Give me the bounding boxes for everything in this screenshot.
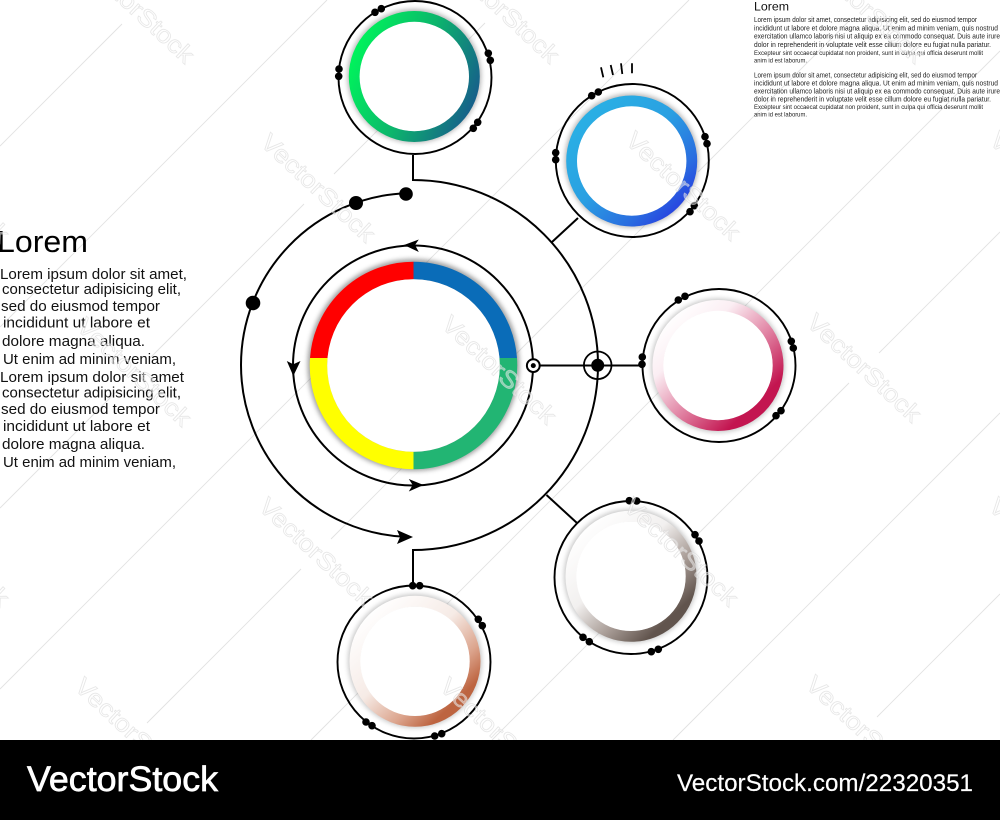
satellite: copper [338,582,490,740]
text: VectorStock [255,129,381,249]
top-right text block: Lorem ipsum dolor sit amet, consectetur adipisicing elit, sed do eiusmod tempor [754,17,978,24]
top-right text block: Lorem ipsum dolor sit amet, consectetur adipisicing elit, sed do eiusmod tempor [754,73,978,80]
left text block [0,267,187,471]
inner orbit with three arrows [287,240,533,492]
connector lines between hub and satellites [413,155,642,585]
top-right text block: anim id est laborum. [754,58,807,65]
left text block: Ut enim ad minim veniam, [3,455,176,471]
footer bar [0,740,1000,820]
top-right text block: anim id est laborum. [754,112,807,119]
left text block: consectetur adipisicing elit, [2,282,181,298]
footer logo text: VectorStock [27,760,219,799]
left text block: consectetur adipisicing elit, [2,386,181,402]
target node on big circle [584,352,612,379]
top-right text block [754,17,1000,119]
left text block: dolore magna aliqua. [2,437,145,453]
footer image id: VectorStock.com/22320351 [677,770,973,797]
connector: hub to pink circle [533,364,642,366]
connector: hub to brown circle [546,495,577,523]
left text block: Lorem ipsum dolor sit amet [0,370,184,386]
satellite: pink [638,289,797,442]
left text block: sed do eiusmod tempor [1,299,160,315]
icon: four tick marks above blue circle [601,63,632,77]
left text block: Lorem ipsum dolor sit amet, [0,267,187,283]
text: VectorStock [620,127,746,247]
text: VectorStock [69,673,195,793]
text: VectorStock [71,313,197,433]
top-right text block: dolor in reprehenderit in voluptate velit esse cillum dolore eu fugiat nulla pariatur. [754,97,991,104]
left text block: Ut enim ad minim veniam, [3,352,176,368]
left text block: sed do eiusmod tempor [1,402,160,418]
left text block: dolore magna aliqua. [2,334,145,350]
text: VectorStock [436,311,562,431]
text: VectorStock [434,673,560,793]
text: VectorStock [618,493,744,613]
top-right text block: Excepteur sint occaecat cupidatat non proident, sunt in culpa qui officia deserunt mollit [754,104,983,111]
top-right heading: Lorem [754,2,789,14]
connector: hub to blue circle [552,218,578,242]
text: VectorStock [253,493,379,613]
big circle with top and bottom stems [413,155,598,585]
left text block: incididunt ut labore et [3,419,150,435]
top-right text block: Excepteur sint occaecat cupidatat non proident, sunt in culpa qui officia deserunt mollit [754,50,983,57]
central segmented ring [308,259,520,471]
satellite: brown [554,497,708,656]
text: VectorStock [800,671,926,791]
left spiral arc with dots and arrow [241,187,413,544]
satellite: blue [552,84,711,237]
small hub node [527,359,540,372]
text: VectorStock [801,309,927,429]
top-right text block: dolor in reprehenderit in voluptate velit esse cillum dolore eu fugiat nulla pariatur. [754,42,991,49]
left text block: incididunt ut labore et [3,316,150,332]
satellite: green [335,1,494,154]
